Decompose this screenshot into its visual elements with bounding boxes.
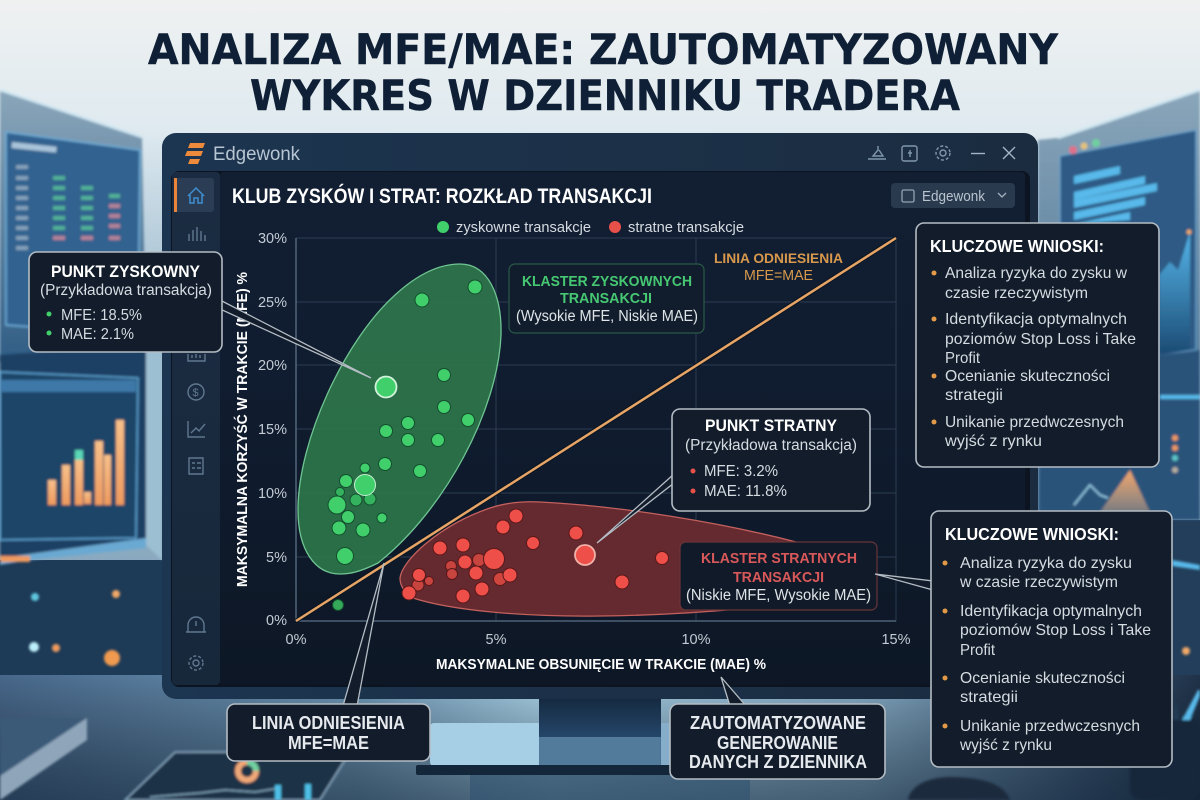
arrow: automated data pointer bbox=[721, 677, 746, 706]
label: losing cluster bbox=[680, 542, 877, 610]
y axis tick labels: 25% bbox=[258, 295, 287, 311]
x axis tick labels bbox=[286, 632, 911, 648]
panel: key takeaways bottom: Identyfikacja optymalnych bbox=[960, 603, 1142, 620]
label: profitable cluster: (Wysokie MFE, Niskie MAE) bbox=[516, 308, 698, 325]
background monitor: left bar chart bbox=[0, 345, 162, 565]
arrow: losing cluster pointer bbox=[875, 574, 933, 590]
y axis tick labels: 30% bbox=[258, 231, 287, 247]
background: mouse and pen cup bbox=[908, 690, 1200, 800]
callout: automated data generation: GENEROWANIE bbox=[717, 733, 838, 753]
dropdown: Edgewonk bbox=[891, 183, 1015, 208]
label: profitable cluster: TRANSAKCJI bbox=[560, 290, 652, 307]
background: book bbox=[0, 718, 87, 800]
sidebar icon: alert bbox=[186, 617, 206, 632]
callout: automated data generation bbox=[670, 704, 885, 779]
background monitor: right dashboard bbox=[1038, 90, 1200, 655]
app header logo: Edgewonk: Edgewonk bbox=[213, 144, 300, 165]
green cluster area bbox=[298, 264, 501, 574]
panel: key takeaways bottom: wyjść z rynku bbox=[959, 737, 1052, 754]
label: losing cluster: (Niskie MFE, Wysokie MAE) bbox=[686, 587, 871, 604]
x axis tick labels: 15% bbox=[881, 632, 911, 648]
panel: key takeaways bottom: w czasie rzeczywistym bbox=[959, 574, 1118, 591]
panel: key takeaways bottom: poziomów Stop Loss i Take bbox=[960, 622, 1151, 639]
highlighted losing point bbox=[575, 545, 595, 565]
y axis tick labels bbox=[258, 231, 287, 629]
y axis tick labels: 15% bbox=[258, 422, 287, 438]
highlighted winning point bbox=[376, 376, 396, 398]
label: profitable cluster: KLASTER ZYSKOWNYCH bbox=[522, 273, 692, 290]
sidebar icon: dollar bbox=[188, 384, 204, 400]
monitor stand bbox=[416, 699, 790, 800]
sidebar icon: line chart bbox=[188, 421, 205, 437]
sidebar icon: settings bbox=[189, 656, 203, 670]
panel: key takeaways bottom: Ocenianie skuteczności bbox=[960, 670, 1125, 687]
callout: winning point: MFE: 18.5% bbox=[61, 307, 142, 324]
arrow: reference line pointer bbox=[343, 563, 384, 706]
panel: key takeaways top: KLUCZOWE WNIOSKI: bbox=[930, 236, 1104, 256]
y axis tick labels: 0% bbox=[266, 613, 287, 629]
panel: key takeaways top: poziomów Stop Loss i Take bbox=[945, 331, 1136, 348]
panel: key takeaways top bbox=[916, 223, 1159, 467]
chart title: KLUB ZYSKÓW I STRAT: ROZKŁAD TRANSAKCJI bbox=[232, 183, 652, 208]
callout: losing point: MFE: 3.2% bbox=[704, 463, 778, 480]
background monitor: left table bbox=[0, 90, 146, 365]
label: reference line: MFE=MAE bbox=[744, 268, 813, 284]
sidebar bbox=[172, 172, 220, 685]
y axis tick labels: 5% bbox=[266, 550, 287, 566]
callout: winning point bbox=[29, 252, 222, 352]
sidebar icon: reports bbox=[188, 354, 205, 361]
chart panel bbox=[220, 172, 1025, 685]
sidebar icon: bars bbox=[189, 227, 205, 241]
sidebar active home item bbox=[174, 178, 214, 212]
y axis tick labels: 10% bbox=[258, 486, 287, 502]
x axis tick labels: 10% bbox=[681, 632, 711, 648]
callout: reference line: MFE=MAE bbox=[288, 733, 369, 753]
arrow: losing point pointer bbox=[597, 474, 674, 543]
panel: key takeaways top: Profit bbox=[945, 350, 981, 367]
y axis title: MAKSYMALNA KORZYŚĆ W TRAKCIE (MFE) % bbox=[233, 272, 251, 587]
panel: key takeaways bottom: Unikanie przedwczesnych bbox=[960, 718, 1140, 735]
scatter chart bbox=[233, 231, 911, 673]
title: WYKRES W DZIENNIKU TRADERA bbox=[250, 71, 960, 120]
title bbox=[148, 25, 1059, 120]
background bokeh lights bbox=[29, 590, 120, 666]
sidebar icon: checklist bbox=[189, 458, 203, 474]
callout: winning point: MAE: 2.1% bbox=[61, 326, 134, 343]
label: profitable cluster bbox=[509, 264, 704, 333]
y axis tick labels: 20% bbox=[258, 358, 287, 374]
callout: reference line: LINIA ODNIESIENIA bbox=[252, 713, 405, 733]
panel: key takeaways top: Ocenianie skuteczności bbox=[945, 368, 1110, 385]
callout: automated data generation: DANYCH Z DZIENNIKA bbox=[689, 752, 867, 772]
callout: losing point: PUNKT STRATNY bbox=[705, 417, 837, 435]
panel: key takeaways top: Analiza ryzyka do zysku w bbox=[945, 265, 1127, 282]
callout: winning point: (Przykładowa transakcja) bbox=[40, 282, 212, 299]
dropdown: Edgewonk: Edgewonk bbox=[922, 188, 985, 205]
arrow: winning point pointer bbox=[220, 300, 371, 378]
legend: stratne transakcje bbox=[628, 219, 744, 236]
panel: key takeaways bottom bbox=[931, 511, 1172, 767]
x axis tick labels: 5% bbox=[486, 632, 507, 648]
legend: zyskowne transakcje bbox=[456, 219, 591, 236]
sidebar icon: dollar: $ bbox=[192, 387, 199, 399]
title: ANALIZA MFE/MAE: ZAUTOMATYZOWANY bbox=[148, 25, 1059, 74]
label: reference line: LINIA ODNIESIENIA bbox=[714, 250, 843, 266]
background: tablet bbox=[125, 752, 350, 800]
reference line MFE=MAE bbox=[296, 238, 896, 621]
label: losing cluster: KLASTER STRATNYCH bbox=[701, 550, 857, 567]
legend bbox=[437, 219, 744, 236]
callout: losing point: (Przykładowa transakcja) bbox=[685, 437, 857, 454]
x axis tick labels: 0% bbox=[286, 632, 307, 648]
callout: automated data generation: ZAUTOMATYZOWANE bbox=[690, 713, 866, 733]
window control icons bbox=[868, 146, 1015, 161]
panel: key takeaways bottom: Profit bbox=[960, 642, 996, 659]
callout: winning point: PUNKT ZYSKOWNY bbox=[51, 263, 200, 281]
panel: key takeaways top: czasie rzeczywistym bbox=[945, 285, 1088, 302]
x axis title: MAKSYMALNE OBSUNIĘCIE W TRAKCIE (MAE) % bbox=[436, 657, 766, 673]
panel: key takeaways bottom: KLUCZOWE WNIOSKI: bbox=[945, 524, 1119, 544]
callout: losing point bbox=[672, 409, 870, 511]
monitor frame bbox=[162, 133, 1038, 699]
panel: key takeaways bottom: strategii bbox=[960, 689, 1018, 706]
label: losing cluster: TRANSAKCJI bbox=[733, 569, 824, 586]
panel: key takeaways top: strategii bbox=[945, 387, 1003, 404]
label: reference line bbox=[714, 250, 843, 284]
panel: key takeaways top: Unikanie przedwczesnych bbox=[945, 414, 1124, 431]
callout: losing point: MAE: 11.8% bbox=[704, 483, 787, 500]
panel: key takeaways bottom: Analiza ryzyka do zysku bbox=[960, 555, 1132, 572]
panel: key takeaways top: Identyfikacja optymalnych bbox=[945, 311, 1127, 328]
losing trade points bbox=[402, 509, 668, 603]
panel: key takeaways top: wyjść z rynku bbox=[944, 433, 1042, 450]
red cluster area bbox=[400, 502, 872, 616]
chart grid bbox=[296, 238, 896, 621]
profitable trade points bbox=[328, 280, 482, 610]
callout: reference line bbox=[227, 704, 430, 761]
